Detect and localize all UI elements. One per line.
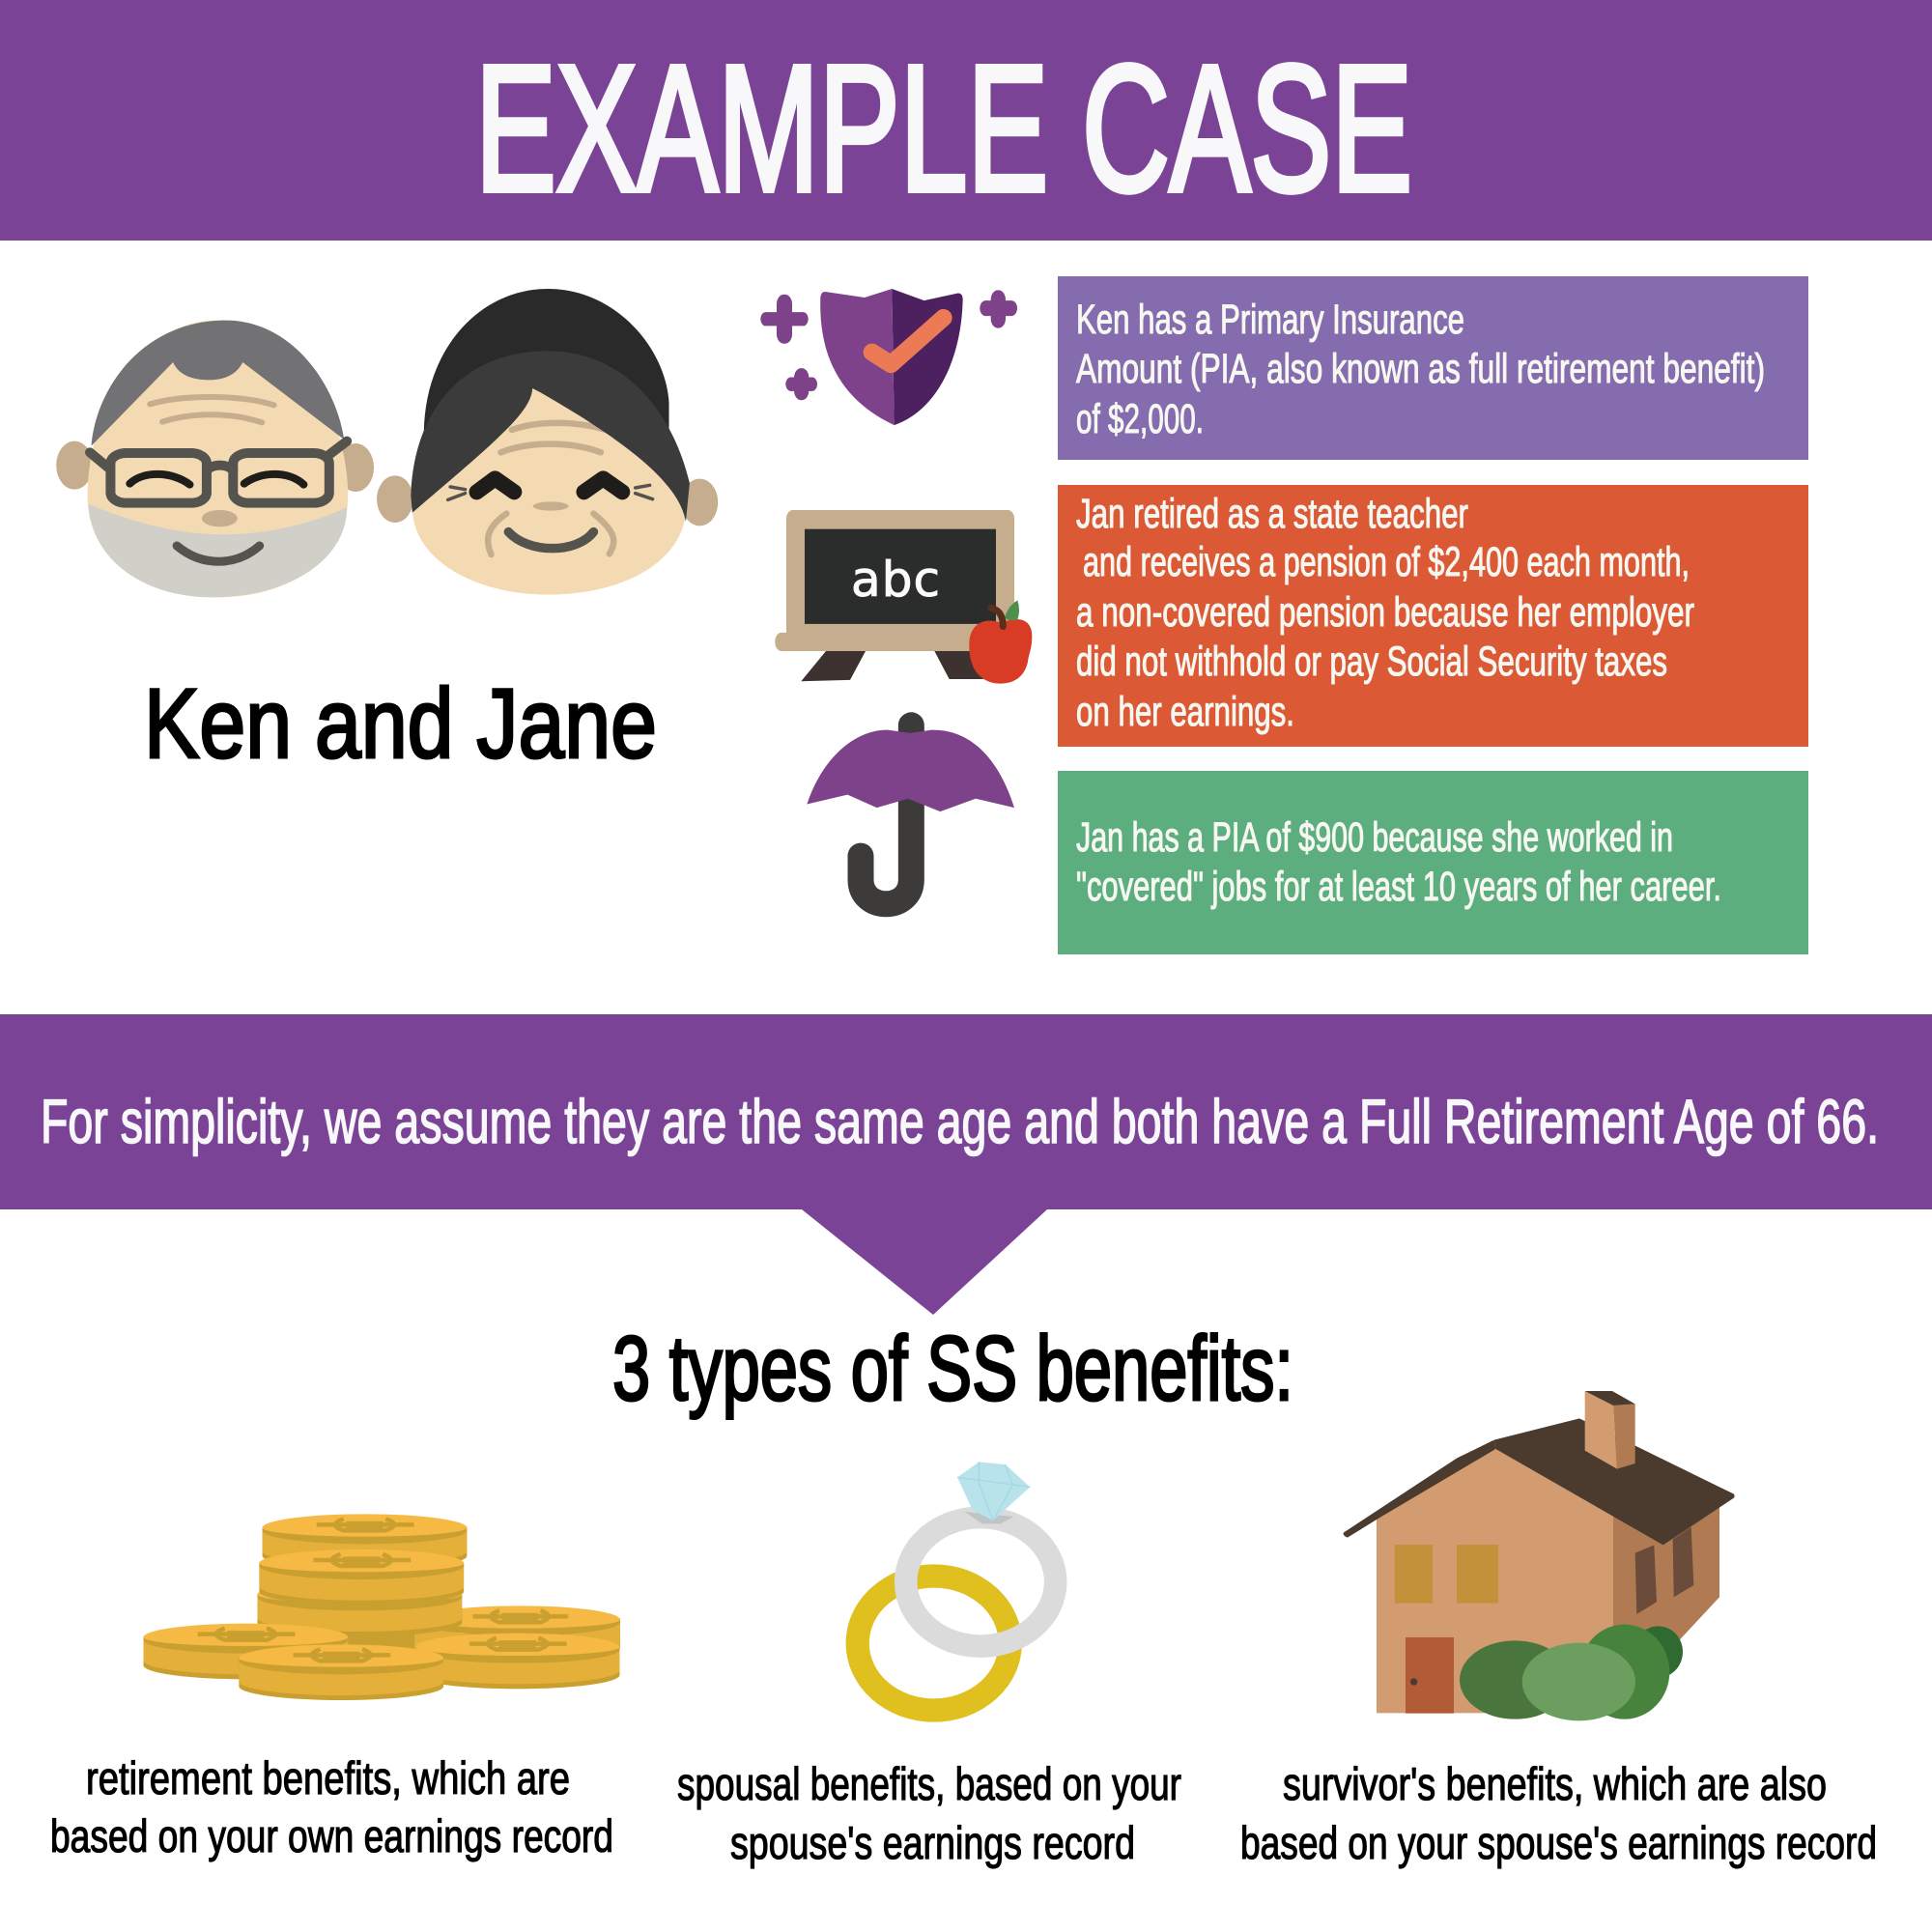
icon: house with bushes (1344, 1391, 1735, 1720)
panel: Jan pension: Jan retired as a state teacher (1076, 491, 1468, 537)
icon: Jane face (377, 289, 718, 595)
caption: spousal benefits: spouse's earnings record (730, 1817, 1135, 1868)
caption: retirement benefits: based on your own earnings record (50, 1810, 613, 1861)
caption: retirement benefits: retirement benefits, which are (86, 1752, 570, 1804)
icon: coin stacks (143, 1514, 620, 1700)
title: EXAMPLE CASE (475, 29, 1412, 229)
assumption banner with pointer (0, 1014, 1932, 1315)
heading: Ken and Jane: Ken and Jane (144, 668, 657, 779)
panel: Ken PIA: Ken has a Primary Insurance (1076, 297, 1464, 343)
chalkboard text: abc: abc (851, 552, 940, 608)
header banner (0, 0, 1932, 241)
icon: wedding rings (846, 1462, 1066, 1722)
icon: Ken face (56, 321, 374, 597)
panel: Jan PIA: Jan has a PIA of $900 because she worked in (1076, 814, 1673, 861)
icon: shield with check (760, 289, 1017, 425)
panel: Jan pension: and receives a pension of $2,400 each month, (1083, 539, 1690, 585)
caption: retirement benefits (50, 1752, 613, 1861)
icon: chalkboard with apple (775, 510, 1032, 684)
caption: spousal benefits (677, 1758, 1181, 1868)
panel: Jan pension (1058, 485, 1808, 747)
icon: umbrella (807, 725, 1014, 904)
heading: 3 types of SS benefits: 3 types of SS benefits: (612, 1318, 1293, 1420)
panel: Jan pension: a non-covered pension because her employer (1076, 589, 1694, 636)
caption: spousal benefits: spousal benefits, based on your (677, 1758, 1181, 1809)
panel: Ken PIA (1058, 276, 1808, 460)
panel: Jan pension: on her earnings. (1076, 689, 1294, 735)
panel: Jan pension: did not withhold or pay Social Security taxes (1076, 639, 1667, 685)
panel: Ken PIA: of $2,000. (1076, 396, 1204, 442)
panel: Jan PIA (1058, 771, 1808, 954)
caption: survivor's benefits (1240, 1758, 1877, 1868)
